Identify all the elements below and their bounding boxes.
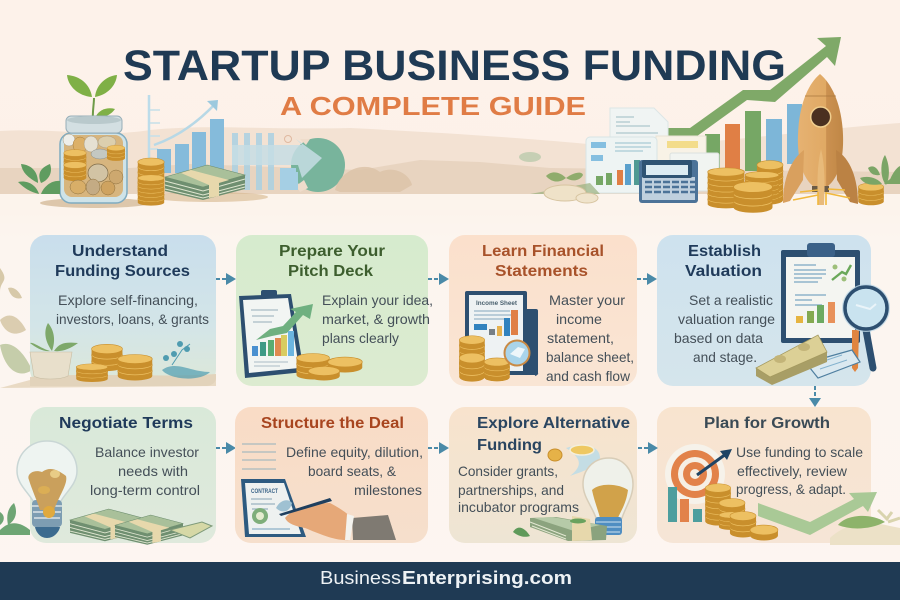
arrow xyxy=(428,273,449,285)
panel: Negotiate Terms xyxy=(0,407,216,545)
illustration: seedling coin jar xyxy=(40,75,150,208)
body text xyxy=(322,292,433,346)
hero landscape band xyxy=(0,123,900,210)
heading xyxy=(55,243,190,280)
footer text: Business xyxy=(320,568,401,588)
icon: coin lightbulb xyxy=(583,458,633,535)
illustration: coin stack and cash xyxy=(138,158,268,206)
icon: magnifier xyxy=(504,340,537,375)
illustration: right sprig xyxy=(860,155,900,185)
heading: Establish xyxy=(688,243,761,260)
icon: mini bars xyxy=(668,487,702,522)
body text xyxy=(56,292,209,327)
body text: investors, loans, & grants xyxy=(56,311,209,327)
icon: clipboard with growth chart xyxy=(239,290,313,378)
arrow xyxy=(216,442,236,454)
body text: needs with xyxy=(118,463,188,479)
icon: coin lightbulb xyxy=(17,441,77,538)
illustration: green growth arrow xyxy=(666,37,841,139)
body text: partnerships, and xyxy=(458,482,564,498)
decoration: right-edge leaves xyxy=(830,510,900,545)
icon: potted plant xyxy=(30,323,78,379)
heading xyxy=(477,415,630,454)
arrow xyxy=(428,442,449,454)
heading: Funding Sources xyxy=(55,263,190,280)
heading: Explore Alternative xyxy=(477,415,630,432)
panel: Explore Alternative Funding xyxy=(449,407,637,543)
heading: Prepare Your xyxy=(279,243,385,260)
heading: Funding xyxy=(477,437,542,454)
heading: Learn Financial xyxy=(482,243,604,260)
jar xyxy=(60,116,127,203)
body text: statement, xyxy=(547,330,614,346)
body text xyxy=(546,292,634,384)
body text: valuation range xyxy=(678,311,775,327)
icon: coin stacks xyxy=(459,336,510,382)
footer text: Enterprising.com xyxy=(402,568,572,588)
icon: money and booklet xyxy=(756,335,860,385)
panel: Establish Valuation xyxy=(657,235,890,386)
body text: plans clearly xyxy=(322,330,399,346)
heading xyxy=(482,243,604,280)
body text xyxy=(286,444,423,498)
plant xyxy=(67,75,117,125)
body text: and cash flow xyxy=(546,368,631,384)
icon: cash stacks xyxy=(70,509,212,545)
panel: Plan for Growth xyxy=(657,407,877,543)
heading: Understand xyxy=(72,243,168,260)
illustration: muted left-centre foliage and seashell xyxy=(335,152,600,203)
icon: income statement tablet: Income Sheet xyxy=(476,300,518,307)
body text: Balance investor xyxy=(95,444,199,460)
footer bar xyxy=(0,562,900,600)
illustration: faded blue growth chart xyxy=(149,95,345,192)
icon: contract xyxy=(241,479,306,537)
heading: Statements xyxy=(495,263,588,280)
icon: magnifier and pencil xyxy=(842,284,890,372)
body text: milestones xyxy=(354,482,422,498)
body text: and stage. xyxy=(693,349,757,365)
body text: income xyxy=(556,311,602,327)
body text xyxy=(458,463,579,515)
heading: Structure the Deal xyxy=(261,415,404,432)
icon: side leaves xyxy=(0,503,30,535)
panel: Prepare Your Pitch Deck xyxy=(236,235,433,386)
panel: Learn Financial Statements xyxy=(449,235,637,386)
subtitle: A COMPLETE GUIDE xyxy=(280,91,586,121)
body text: balance sheet, xyxy=(546,349,634,365)
left margin foliage xyxy=(0,268,216,388)
icon: floating coins and swoosh xyxy=(548,445,600,476)
panel: Structure the Deal xyxy=(235,407,428,543)
body text xyxy=(674,292,775,365)
icon: income statement tablet xyxy=(465,291,538,375)
heading: Valuation xyxy=(685,263,762,280)
card ground xyxy=(30,374,216,386)
icon: cash stack xyxy=(513,516,607,541)
body text: long-term control xyxy=(90,482,200,498)
illustration: coin stacks xyxy=(708,160,884,213)
icon: text lines xyxy=(242,444,276,469)
body text: Explain your idea, xyxy=(322,292,433,308)
body text: Master your xyxy=(549,292,625,308)
arrow xyxy=(216,273,236,285)
body text: market, & growth xyxy=(322,311,430,327)
panel: Understand Funding Sources xyxy=(30,235,216,386)
body text xyxy=(736,444,863,497)
icon: coin stairs xyxy=(705,484,778,540)
title: STARTUP BUSINESS FUNDING xyxy=(123,42,786,90)
arrow xyxy=(809,386,821,407)
icon: hand with pen xyxy=(279,498,396,540)
illustration: wooden rocket xyxy=(783,74,858,205)
body text: based on data xyxy=(674,330,763,346)
body text: board seats, & xyxy=(308,463,397,479)
illustration: small green shrub xyxy=(18,164,60,194)
illustration: documents and mini chart xyxy=(586,108,719,193)
icon: coin stacks xyxy=(76,344,152,382)
body text: Define equity, dilution, xyxy=(286,444,423,460)
illustration: calculator xyxy=(639,160,698,203)
icon: valuation clipboard xyxy=(781,243,860,343)
arrow xyxy=(637,273,657,285)
body text: effectively, review xyxy=(737,463,848,479)
icon: coins xyxy=(296,354,362,380)
body text: incubator programs xyxy=(458,499,579,515)
illustration: colored bar chart xyxy=(705,104,802,171)
heading xyxy=(279,243,385,280)
icon: contract: CONTRACT xyxy=(251,489,278,495)
body text: Use funding to scale xyxy=(736,444,863,460)
body text: Consider grants, xyxy=(458,463,558,479)
icon: target with arrow xyxy=(665,444,732,504)
heading xyxy=(685,243,762,280)
heading: Plan for Growth xyxy=(704,415,830,432)
heading: Negotiate Terms xyxy=(59,415,193,432)
icon: green rising arrow xyxy=(758,492,877,535)
arrow xyxy=(638,442,658,454)
body text xyxy=(90,444,200,498)
heading: Pitch Deck xyxy=(288,263,373,280)
icon: teal sprig xyxy=(162,341,210,379)
body text: Set a realistic xyxy=(689,292,773,308)
body text: progress, & adapt. xyxy=(736,481,846,497)
body text: Explore self-financing, xyxy=(58,292,198,308)
